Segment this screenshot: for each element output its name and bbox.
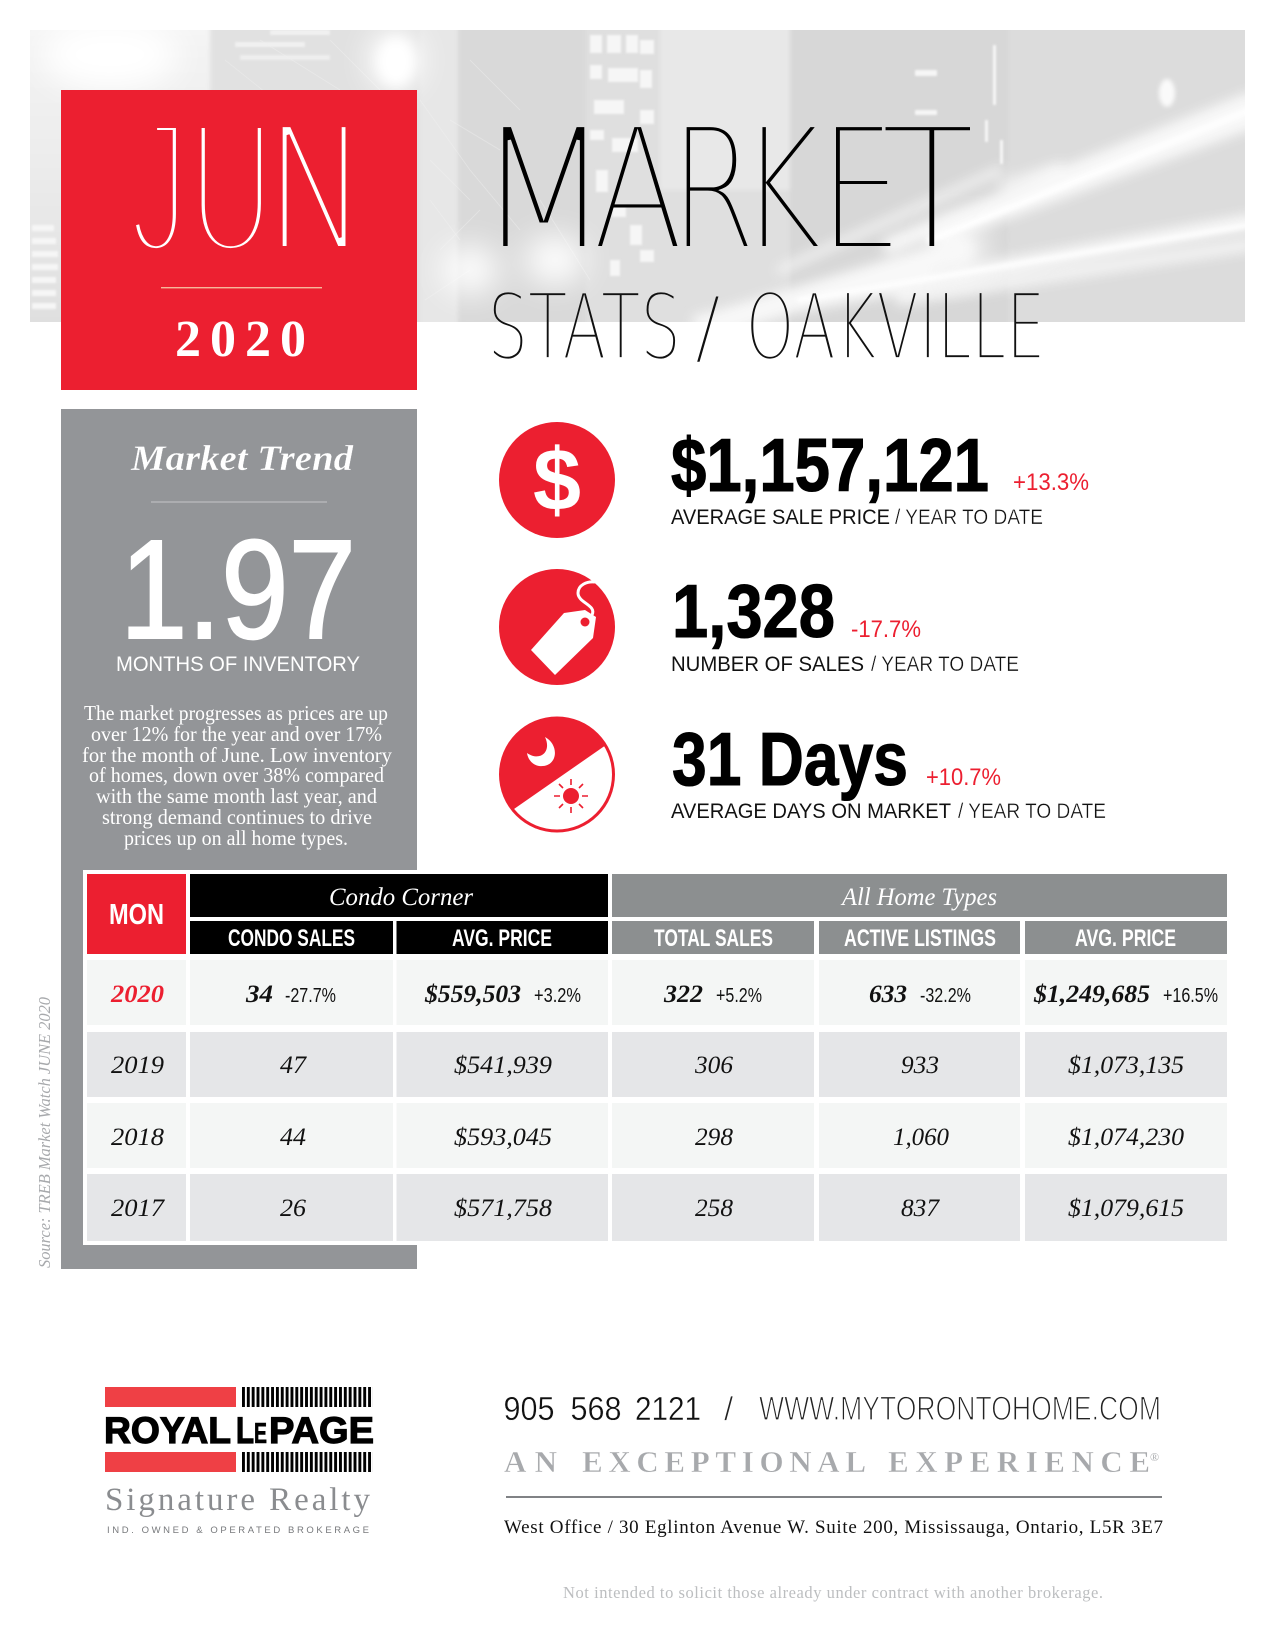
year: 2020	[175, 311, 306, 368]
contact: phone and website	[504, 1390, 1161, 1428]
header: condo corner: Condo Corner	[329, 884, 473, 911]
row 2019: 47	[280, 1052, 308, 1079]
stat: number of sales: NUMBER OF SALES	[671, 652, 864, 676]
tagline: ®	[1150, 1450, 1159, 1464]
icon: dollar	[499, 422, 615, 538]
row 2020: +3.2%	[534, 985, 581, 1007]
row 2017: 258	[695, 1195, 734, 1222]
row 2017: 26	[280, 1195, 307, 1222]
red date panel	[61, 90, 417, 390]
header: condo corner: CONDO SALES	[228, 925, 355, 952]
heading: Market Trend	[130, 438, 354, 478]
logo: Royal LePage Signature Realty	[104, 1387, 374, 1536]
tree branches	[344, 54, 559, 231]
row 2020: $559,503	[424, 981, 521, 1008]
source note: Source: TREB Market Watch JUNE 2020	[35, 997, 54, 1268]
stat: number of sales	[671, 569, 1019, 676]
row 2020: +16.5%	[1163, 985, 1218, 1007]
logo: Royal LePage Signature Realty: PAGE	[269, 1410, 374, 1451]
row 2020: 34	[245, 981, 273, 1008]
commentary: The market progresses as prices are up	[84, 701, 388, 725]
stat: number of sales: / YEAR TO DATE	[871, 652, 1019, 676]
contact: phone and website: WWW.MYTORONTOHOME.COM	[759, 1390, 1161, 1428]
tagline: EXCEPTIONAL	[582, 1444, 866, 1479]
row 2019: $541,939	[454, 1052, 553, 1079]
month JUN	[136, 127, 346, 248]
header: month: MON	[109, 899, 164, 931]
header: condo corner	[190, 874, 608, 954]
stat: days on market	[671, 717, 1106, 823]
subtitle STATS / OAKVILLE	[494, 292, 1040, 362]
stat: average sale price: +13.3%	[1013, 469, 1089, 496]
stat: average sale price: AVERAGE SALE PRICE	[671, 505, 890, 529]
tagline	[504, 1444, 1159, 1479]
icon: price tag	[499, 569, 615, 685]
disclaimer: Not intended to solicit those already under contract with another brokerage.	[563, 1583, 1103, 1602]
row 2017: 2017	[111, 1195, 166, 1222]
row 2020: +5.2%	[716, 985, 762, 1007]
commentary: with the same month last year, and	[96, 784, 377, 808]
header city photo background	[30, 30, 1245, 322]
contact: phone and website: /	[724, 1390, 734, 1427]
glow spots	[40, 20, 984, 294]
tagline: AN	[504, 1444, 557, 1479]
row 2018: 2018	[111, 1124, 165, 1151]
row 2017	[87, 1174, 1227, 1241]
stat: average sale price: / YEAR TO DATE	[895, 505, 1043, 529]
row 2017: 837	[901, 1195, 941, 1222]
row 2019: 2019	[111, 1052, 165, 1079]
row 2020: 2020	[110, 981, 165, 1008]
header: all home types: ACTIVE LISTINGS	[844, 925, 996, 952]
tagline: EXPERIENCE	[888, 1444, 1150, 1479]
row 2020	[87, 960, 1227, 1025]
row 2020: $1,249,685	[1033, 981, 1150, 1008]
row 2018: 44	[280, 1124, 306, 1151]
row 2020: 322	[663, 981, 703, 1008]
logo: Royal LePage Signature Realty: IND. OWNED & OPERATED BROKERAGE	[107, 1525, 369, 1536]
icon: day and night	[499, 716, 615, 832]
row 2018: 298	[695, 1124, 734, 1151]
contact: phone and website: 2121	[635, 1390, 701, 1427]
row 2018: $1,074,230	[1068, 1124, 1185, 1151]
row 2020: -27.7%	[285, 985, 336, 1007]
commentary	[82, 701, 392, 850]
inventory label: MONTHS OF INVENTORY	[116, 653, 360, 676]
header: condo corner: AVG. PRICE	[452, 925, 552, 952]
logo: Royal LePage Signature Realty: L	[236, 1410, 254, 1451]
contact: phone and website: 905	[504, 1390, 554, 1427]
office address: West Office / 30 Eglinton Avenue W. Suite 200, Mississauga, Ontario, L5R 3E7	[504, 1517, 1163, 1538]
logo: Royal LePage Signature Realty: Signature Realty	[105, 1482, 370, 1518]
row 2019: 933	[901, 1052, 939, 1079]
stat: number of sales: -17.7%	[851, 616, 921, 643]
stat: days on market: AVERAGE DAYS ON MARKET	[671, 799, 951, 823]
row 2020: 633	[869, 981, 907, 1008]
row 2018: 1,060	[893, 1124, 949, 1151]
logo: Royal LePage Signature Realty: ROYAL	[104, 1410, 231, 1451]
light trails	[700, 100, 1250, 322]
commentary: for the month of June. Low inventory	[82, 743, 392, 767]
commentary: prices up on all home types.	[124, 826, 348, 850]
row 2019: 306	[694, 1052, 734, 1079]
commentary: strong demand continues to drive	[102, 805, 372, 829]
commentary: of homes, down over 38% compared	[89, 763, 384, 787]
icon: dollar: $	[533, 430, 581, 529]
row 2017: $1,079,615	[1068, 1195, 1184, 1222]
inventory figure: 1.97	[120, 510, 356, 668]
header: all home types: All Home Types	[840, 884, 997, 911]
stat: days on market: 31 Days	[672, 717, 908, 801]
row 2019	[87, 1032, 1227, 1097]
title MARKET	[503, 127, 970, 246]
stat: days on market: +10.7%	[926, 764, 1001, 791]
commentary: over 12% for the year and over 17%	[91, 722, 382, 746]
table	[83, 870, 1232, 1245]
row 2018	[87, 1103, 1227, 1168]
row 2018: $593,045	[454, 1124, 552, 1151]
contact: phone and website: 568	[570, 1390, 622, 1427]
stat: average sale price: $1,157,121	[671, 423, 989, 507]
panel: market trend	[61, 409, 417, 1269]
row 2020: -32.2%	[920, 985, 971, 1007]
stat: days on market: / YEAR TO DATE	[958, 799, 1106, 823]
stat: number of sales: 1,328	[672, 569, 835, 653]
row 2019: $1,073,135	[1068, 1052, 1184, 1079]
header: all home types: AVG. PRICE	[1075, 925, 1176, 952]
logo: Royal LePage Signature Realty: E	[254, 1418, 267, 1450]
header: all home types	[612, 874, 1227, 954]
header: all home types: TOTAL SALES	[654, 925, 773, 952]
row 2017: $571,758	[454, 1195, 553, 1222]
header: month	[87, 874, 186, 954]
